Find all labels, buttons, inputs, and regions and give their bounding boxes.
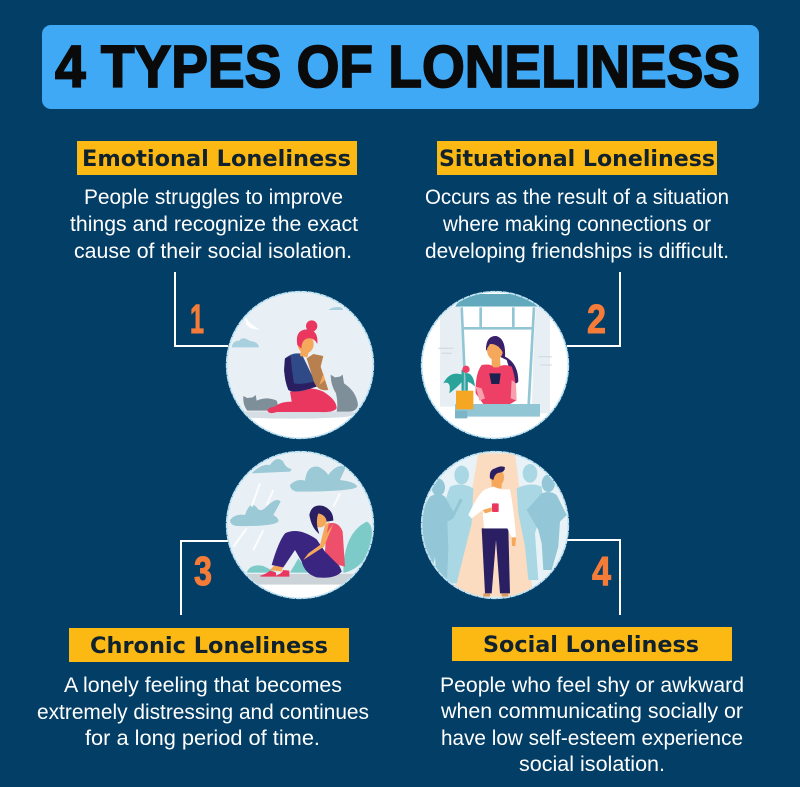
heading: Chronic Loneliness: Chronic Loneliness — [90, 634, 328, 659]
text: Social Loneliness description: social isolation. — [519, 753, 665, 776]
heading: Social Loneliness — [452, 627, 732, 661]
number 2: 2 — [587, 296, 606, 342]
illustration 3: woman sitting in the rain — [227, 452, 373, 598]
text: Social Loneliness description: People who feel shy or awkward — [440, 674, 744, 697]
text: Chronic Loneliness description — [37, 674, 369, 750]
text: Social Loneliness description: when communicating socially or — [440, 700, 743, 723]
text: Situational Loneliness description: where making connections or — [442, 213, 711, 236]
illustration 1: woman hugging a cat — [223, 290, 377, 440]
connector 3 — [181, 541, 228, 615]
text: Chronic Loneliness description: for a long period of time. — [85, 727, 320, 750]
connector 4 — [567, 540, 620, 615]
number 1: 1 — [190, 296, 204, 342]
heading: Social Loneliness: Social Loneliness — [483, 633, 699, 658]
text: Situational Loneliness description: developing friendships is difficult. — [425, 240, 729, 263]
text: Emotional Loneliness description: People struggles to improve — [84, 186, 343, 209]
title banner: 4 TYPES OF LONELINESS — [55, 34, 740, 100]
connector 2 — [567, 272, 620, 346]
text: Emotional Loneliness description: cause of their social isolation. — [74, 240, 352, 263]
number 4: 4 — [592, 548, 611, 594]
text: Chronic Loneliness description: A lonely feeling that becomes — [64, 674, 342, 697]
text: Situational Loneliness description — [425, 186, 729, 263]
heading: Emotional Loneliness — [77, 141, 357, 175]
text: Social Loneliness description — [440, 674, 744, 776]
heading: Chronic Loneliness — [69, 628, 349, 662]
connector 1 — [175, 272, 228, 346]
text: Chronic Loneliness description: extremely distressing and continues — [37, 701, 369, 724]
text: Emotional Loneliness description: things and recognize the exact — [70, 213, 358, 236]
illustration 4: man standing among silhouettes — [420, 450, 573, 600]
heading: Emotional Loneliness: Emotional Loneliness — [82, 147, 351, 172]
heading: Situational Loneliness: Situational Loneliness — [439, 147, 715, 172]
number 3: 3 — [194, 548, 212, 594]
text: Emotional Loneliness description — [70, 186, 358, 263]
text: Situational Loneliness description: Occurs as the result of a situation — [425, 186, 729, 209]
text: Social Loneliness description: have low self-esteem experience — [441, 727, 743, 750]
illustration 2: woman at a window — [420, 290, 573, 440]
